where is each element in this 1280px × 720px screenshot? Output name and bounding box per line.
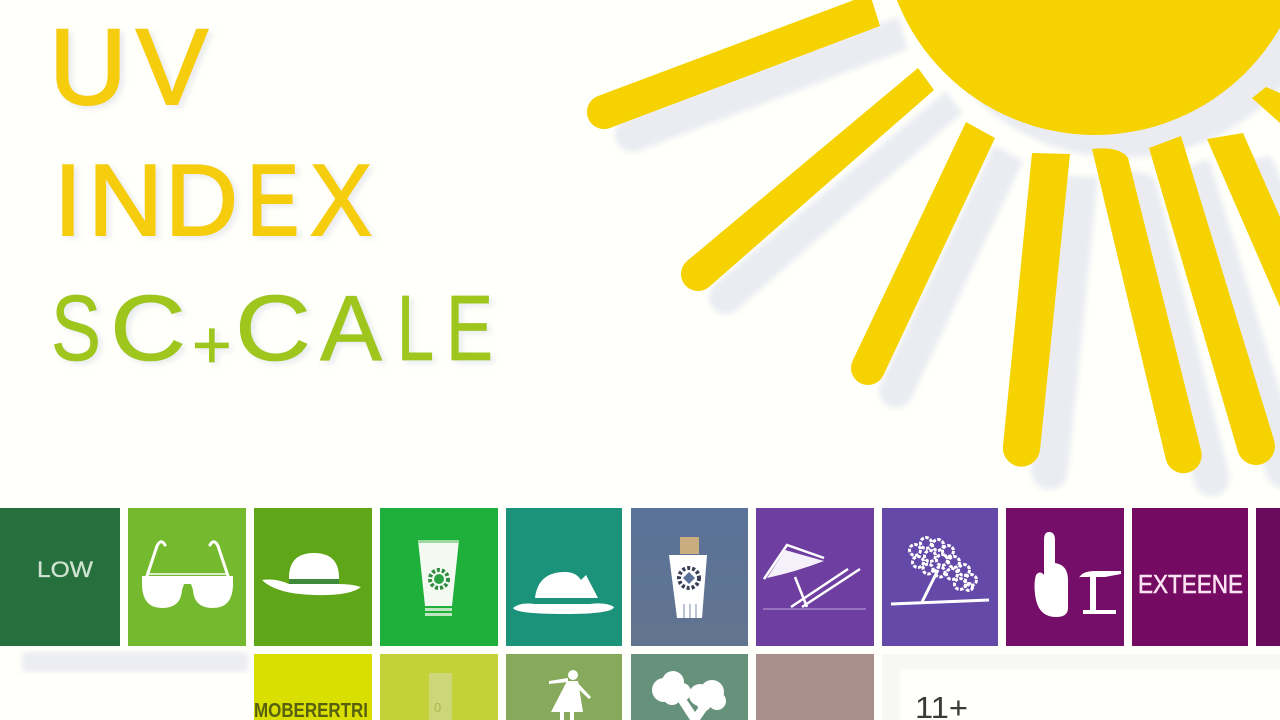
shadow bar under tiles — [22, 652, 248, 672]
tile: teal hat — [506, 508, 622, 646]
tile: tree — [631, 654, 748, 720]
icon: flowering tree — [891, 538, 989, 604]
tile: lime with tube — [380, 654, 498, 720]
tile: partial right — [1256, 508, 1280, 646]
tile: extreme — [1132, 508, 1248, 646]
title line: INDEX: X — [310, 145, 372, 257]
title — [49, 6, 493, 383]
icon: wide-brim hat — [262, 553, 361, 595]
icon: raised hand and stand — [1034, 532, 1121, 617]
tile: extreme: EXTEENE — [1138, 569, 1243, 599]
icon: sunscreen tube — [418, 540, 459, 616]
tile: hat — [254, 508, 372, 646]
tile: beach umbrella — [756, 508, 874, 646]
title line: SC+CALE: C — [110, 276, 186, 380]
icon: sunglasses — [142, 542, 233, 608]
sun shadow — [615, 0, 1280, 496]
title line: INDEX — [54, 145, 372, 257]
title line: SC+CALE: A — [320, 276, 382, 380]
tile: sunglasses — [128, 508, 246, 646]
icon: beach umbrella — [763, 545, 866, 609]
icon: tree — [652, 671, 726, 720]
icon: sunscreen bottle — [669, 537, 707, 618]
title line: SC+CALE: C — [235, 276, 311, 380]
tile: flowering tree — [882, 508, 998, 646]
tile: moderate — [254, 654, 372, 720]
title line: SC+CALE — [51, 276, 493, 383]
title line: INDEX: E — [247, 145, 299, 257]
tile: sunscreen bottle — [631, 508, 748, 646]
tile: low — [0, 508, 120, 646]
title line: INDEX: I — [54, 145, 82, 257]
tile: lime with tube: 0 — [434, 700, 441, 715]
title line: SC+CALE: E — [446, 276, 493, 380]
title line: UV: UV — [49, 6, 208, 127]
title line: INDEX: D — [165, 145, 238, 257]
tile: figure — [506, 654, 622, 720]
tile: sunscreen tube — [380, 508, 498, 646]
icon: sun with rays — [587, 0, 1280, 473]
panel: extreme range card — [882, 654, 1280, 720]
tile: low: LOW — [37, 557, 93, 582]
icon: person in dress — [549, 670, 591, 720]
tile: hand and table — [1006, 508, 1124, 646]
icon: bucket hat — [513, 572, 614, 614]
title line: SC+CALE: S — [51, 276, 101, 380]
title line: SC+CALE: + — [192, 307, 232, 383]
title line: SC+CALE: L — [397, 276, 434, 380]
tile: muted rose — [756, 654, 874, 720]
title line: INDEX: N — [88, 145, 163, 257]
